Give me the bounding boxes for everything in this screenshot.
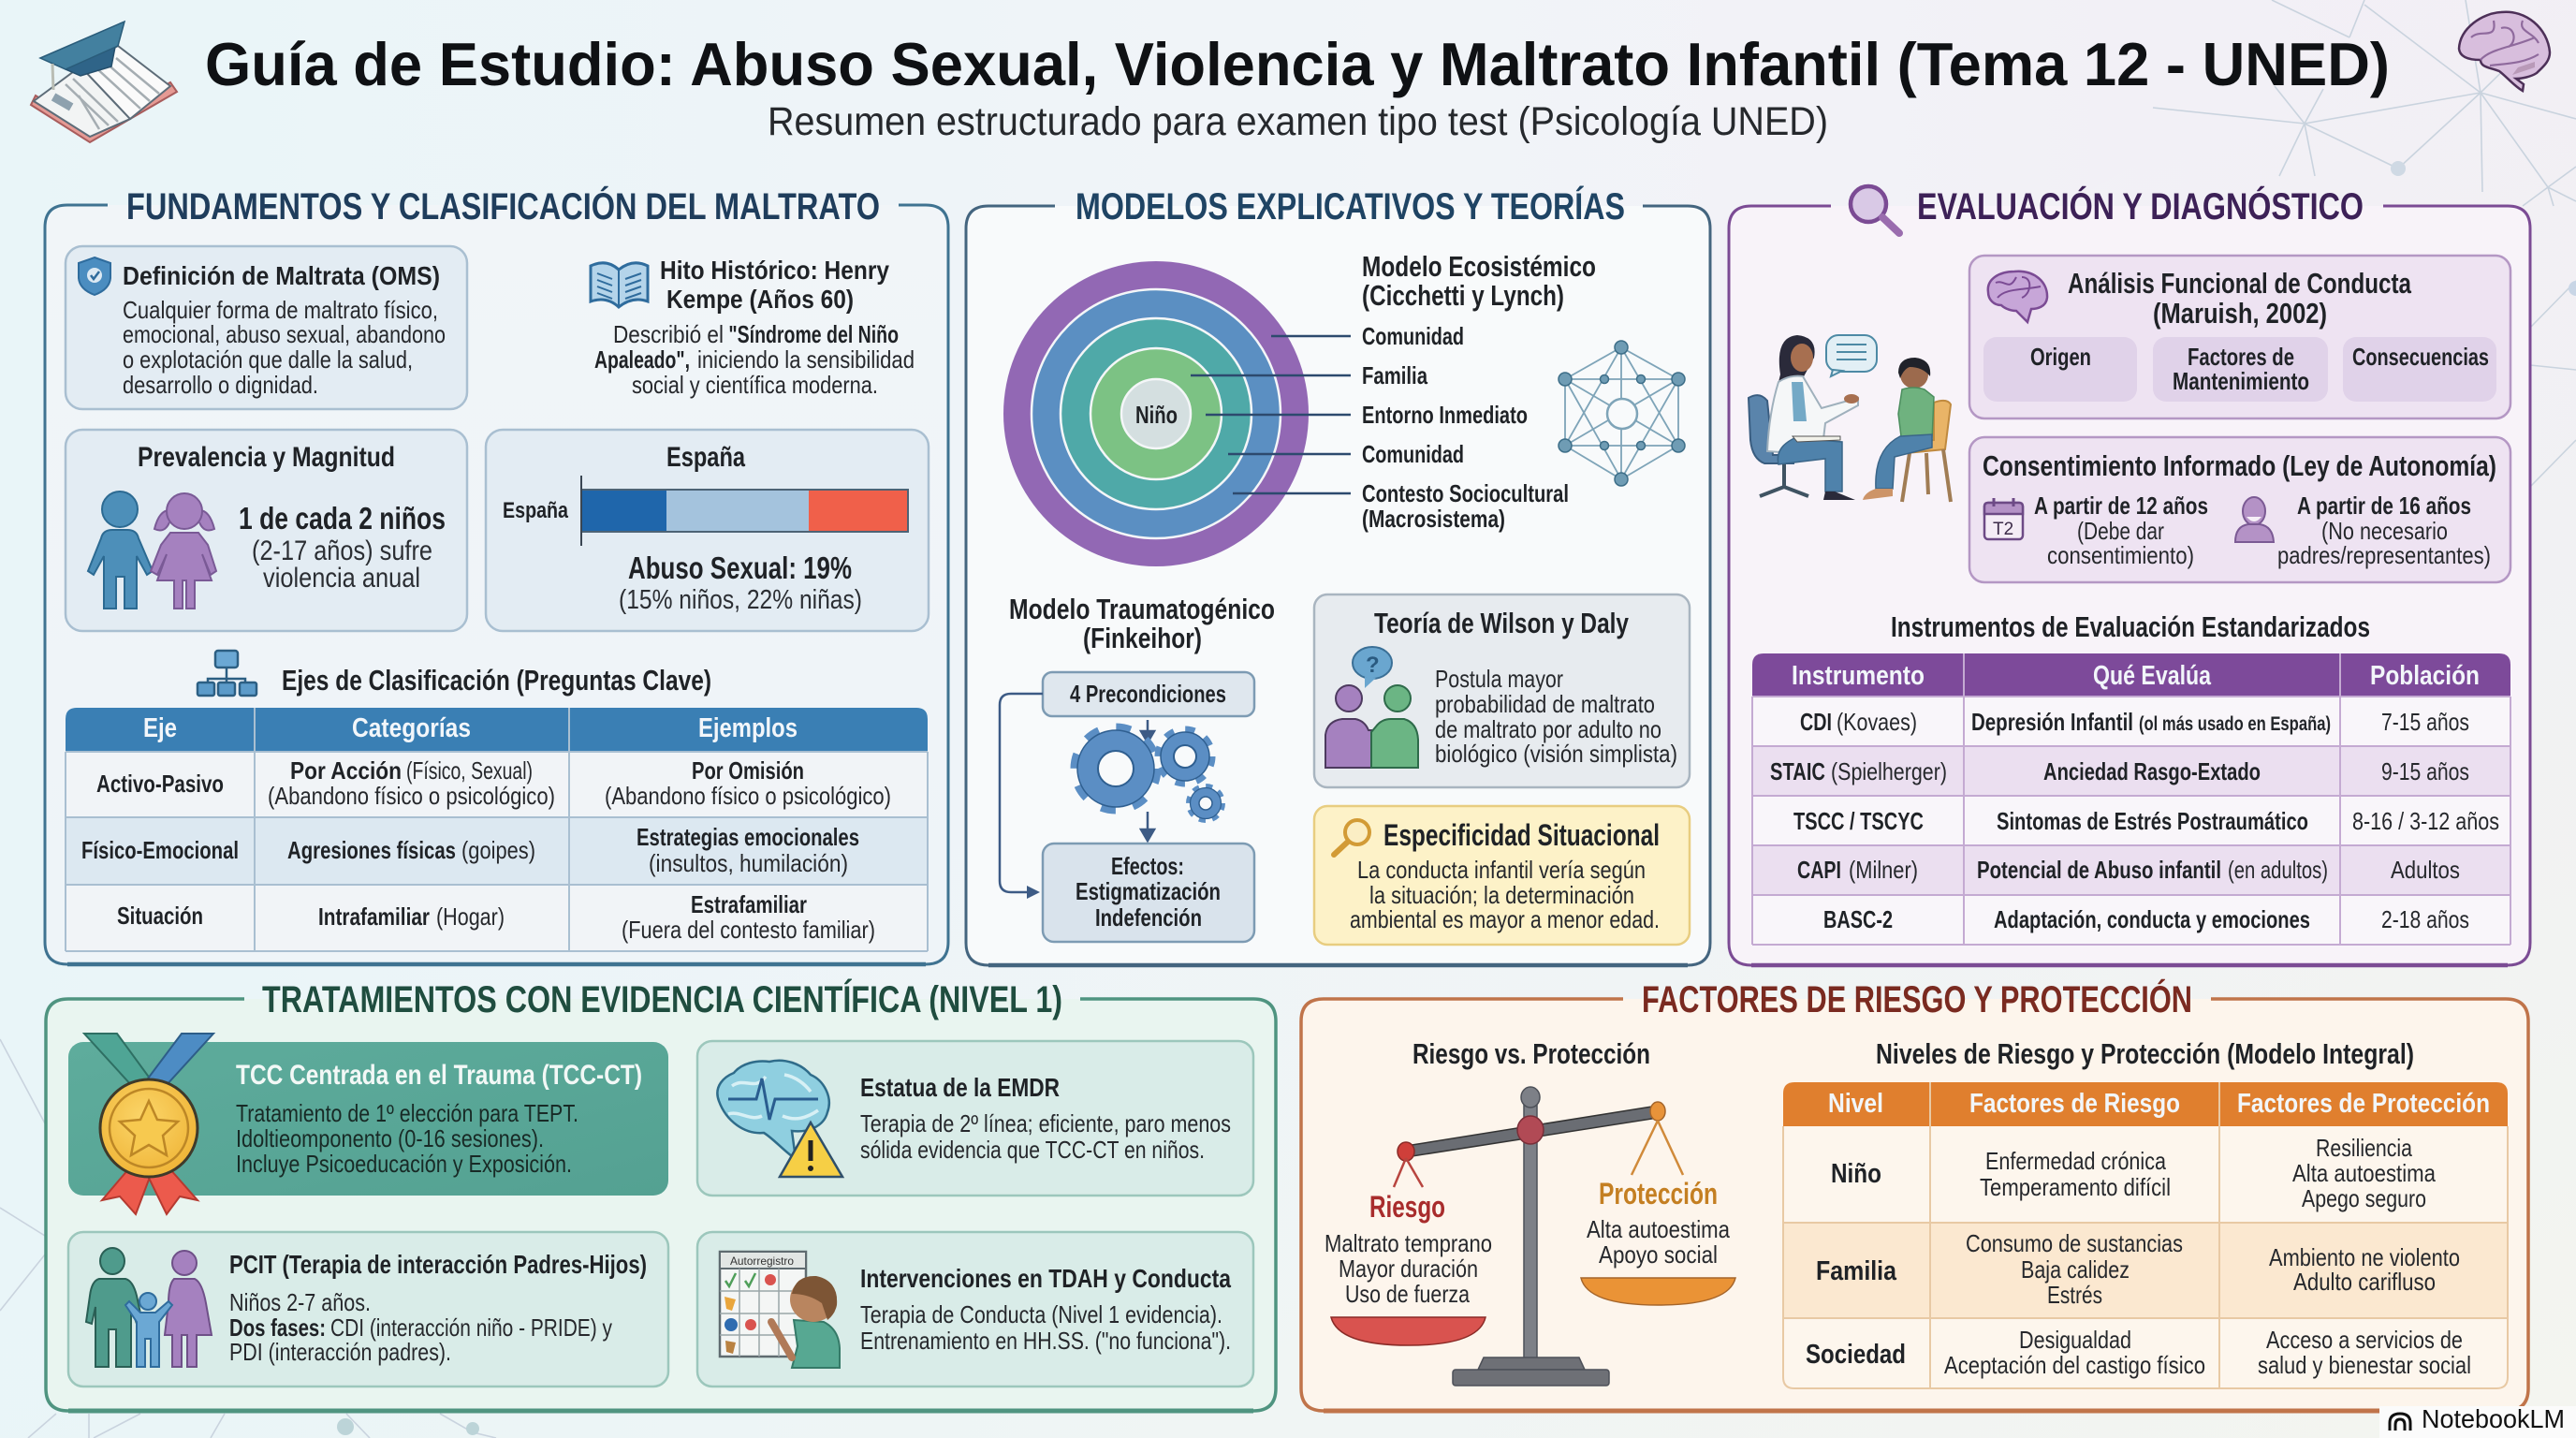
table: instrumentos: (Milner) [1849, 856, 1918, 884]
chart: concentric ecosystem [1003, 261, 1351, 566]
stat: abuso sexual: (15% niños, 22% niñas) [619, 585, 862, 615]
label: riesgo: Riesgo [1369, 1190, 1445, 1224]
card: pcit [68, 1232, 668, 1387]
heading: definición: Definición de Maltrata (OMS) [123, 261, 440, 290]
heading: tcc-ct: TCC Centrada en el Trauma (TCC-CT) [236, 1060, 642, 1091]
text: 12 años: consentimiento) [2047, 541, 2194, 569]
table: niveles: Acceso a servicios de [2266, 1326, 2463, 1354]
box: efectos: Efectos: [1111, 852, 1184, 880]
table: ejes: Categorías [352, 713, 471, 743]
text: tcc-ct: Tratamiento de 1º elección para TEPT. [236, 1099, 578, 1127]
text: definición: Cualquier forma de maltrato físico, [123, 296, 438, 324]
text: especificidad: la situación; la determinación [1369, 881, 1634, 909]
table: instrumentos: 8-16 / 3-12 años [2352, 807, 2499, 835]
labels: ecosystem levels: (Macrosistema) [1362, 505, 1505, 533]
icon: medal [84, 1034, 213, 1214]
heading: modelo ecosistémico: (Cicchetti y Lynch) [1362, 279, 1564, 312]
box: 4 precondiciones: 4 Precondiciones [1070, 680, 1226, 708]
card: consentimiento informado [1969, 437, 2510, 582]
table: ejes: (Hogar) [436, 902, 505, 931]
text: 12 años: (Debe dar [2077, 517, 2164, 545]
heading: modelo traumatogénico: (Finkeihor) [1083, 622, 1202, 654]
labels: ecosystem levels: Comunidad [1362, 322, 1464, 350]
text: definición: o explotación que dalle la salud, [123, 345, 413, 374]
table: niveles: Factores de Protección [2237, 1089, 2490, 1119]
icon: brain [1988, 271, 2047, 322]
panel: modelos explicativos [966, 185, 1710, 965]
text: hito: social y científica moderna. [632, 371, 878, 399]
labels: ecosystem levels [1362, 322, 1569, 533]
panel: evaluación y diagnóstico [1729, 184, 2530, 965]
icon: calendar [1984, 498, 2023, 539]
icon: gears [1076, 729, 1222, 820]
label: riesgo [1325, 1190, 1492, 1308]
table: instrumentos: (Spielherger) [1831, 757, 1947, 785]
table: instrumentos: 7-15 años [2381, 708, 2469, 736]
text: especificidad: ambiental es mayor a menor edad. [1350, 905, 1660, 933]
subtitle: Resumen estructurado para examen tipo test (Psicología UNED) [768, 99, 1828, 144]
illustration: clinician and child [1749, 335, 1951, 502]
table: instrumentos: CAPI [1797, 856, 1841, 884]
label: riesgo: Maltrato temprano [1325, 1229, 1492, 1257]
card: prevalencia [66, 430, 467, 631]
icon: hierarchy [198, 651, 256, 696]
text: definición [123, 296, 446, 399]
table: ejes: (goipes) [461, 836, 535, 864]
text: pcit [229, 1288, 612, 1366]
table: instrumentos: Anciedad Rasgo-Extado [2043, 757, 2261, 785]
text: pcit: Niños 2-7 años. [229, 1288, 371, 1316]
table: instrumentos: Depresión Infantil [1971, 708, 2133, 736]
arrow: feedback connector [1000, 694, 1043, 892]
box: efectos: Indefención [1095, 903, 1202, 932]
table: niveles: Familia [1816, 1256, 1897, 1286]
card: tcc-ct [68, 1034, 668, 1214]
box: 4 precondiciones [1043, 672, 1254, 716]
text: especificidad [1350, 856, 1660, 933]
text: 16 años [2277, 492, 2491, 569]
table: instrumentos: Instrumento [1792, 661, 1925, 691]
text: tcc-ct: Idoltieomponento (0-16 sesiones). [236, 1124, 544, 1152]
labels: ecosystem levels: Entorno Inmediato [1362, 401, 1528, 429]
stat: abuso sexual [619, 550, 862, 615]
heading: especificidad: Especificidad Situacional [1383, 818, 1660, 852]
heading: factores: FACTORES DE RIESGO Y PROTECCIÓN [1642, 977, 2192, 1020]
icon: magnifier purple [1851, 186, 1899, 233]
table: niveles: Aceptación del castigo físico [1944, 1351, 2205, 1379]
card: wilson y daly [1314, 594, 1690, 787]
table: instrumentos: (en adultos) [2228, 856, 2328, 884]
icon: shield [79, 257, 110, 295]
heading: tdah: Intervenciones en TDAH y Conducta [860, 1264, 1231, 1293]
card: análisis funcional [1969, 256, 2510, 418]
table: niveles: Estrés [2047, 1281, 2102, 1309]
text: pcit: PDI (interacción padres). [229, 1338, 451, 1366]
text: tdah: Entrenamiento en HH.SS. ("no funciona"). [860, 1327, 1231, 1355]
text: hito [594, 320, 915, 399]
chip: factores de mantenimiento: Mantenimiento [2173, 367, 2309, 395]
icon: family [86, 1248, 212, 1367]
table: instrumentos: Población [2370, 661, 2480, 691]
text: tdah: Terapia de Conducta (Nivel 1 evidencia). [860, 1300, 1222, 1328]
table: niveles: Alta autoestima [2292, 1159, 2436, 1187]
table: instrumentos: Sintomas de Estrés Postraumático [1997, 807, 2308, 835]
text: hito: Apaleado", [594, 345, 690, 374]
text: 16 años: (No necesario [2321, 517, 2448, 545]
heading: hito [660, 256, 889, 314]
heading: modelos: MODELOS EXPLICATIVOS Y TEORÍAS [1076, 185, 1625, 227]
chip: consecuencias: Consecuencias [2352, 343, 2489, 371]
text: hito: "Síndrome del Niño [724, 320, 899, 348]
heading: españa: España [666, 442, 745, 473]
chart: concentric ecosystem: Niño [1135, 401, 1178, 429]
panel: tratamientos [46, 978, 1276, 1411]
table: ejes [66, 708, 928, 951]
heading: fundamentos: FUNDAMENTOS Y CLASIFICACIÓN DEL MALTRATO [126, 184, 880, 227]
text: hito: iniciendo la sensibilidad [697, 345, 915, 374]
table: ejes: (insultos, humilación) [649, 849, 848, 877]
icon: behaviour chart with child: Autorregistro [730, 1255, 794, 1268]
box: efectos [1043, 844, 1254, 942]
heading: emdr: Estatua de la EMDR [860, 1073, 1060, 1102]
table: ejes: Ejemplos [698, 713, 798, 743]
text: tdah [860, 1300, 1231, 1355]
chip: origen: Origen [2030, 343, 2091, 371]
table: instrumentos [1752, 653, 2510, 945]
text: 16 años: A partir de 16 años [2297, 492, 2471, 520]
table: instrumentos: 9-15 años [2381, 757, 2469, 785]
text: especificidad: La conducta infantil vería según [1357, 856, 1646, 884]
heading: análisis funcional: (Maruish, 2002) [2153, 297, 2327, 330]
table: instrumentos: CDI [1800, 708, 1832, 736]
heading: hito: Kempe (Años 60) [666, 285, 854, 314]
text: 12 años [2034, 492, 2208, 569]
label: riesgo: Mayor duración [1339, 1255, 1478, 1283]
card: especificidad situacional [1314, 806, 1690, 945]
label: protección: Protección [1599, 1177, 1718, 1211]
table: niveles: Consumo de sustancias [1966, 1229, 2183, 1257]
heading: ejes de clasificación: Ejes de Clasificación (Preguntas Clave) [282, 664, 711, 697]
label: riesgo: Uso de fuerza [1345, 1280, 1470, 1308]
text: hito: Describió el [613, 320, 724, 348]
card: definición [66, 246, 467, 409]
table: instrumentos: (Kovaes) [1837, 708, 1917, 736]
box: efectos: Estigmatización [1076, 877, 1221, 905]
table: instrumentos: BASC-2 [1823, 905, 1893, 933]
arrow: gears to efectos [1141, 812, 1154, 841]
heading: niveles: Niveles de Riesgo y Protección (Modelo Integral) [1876, 1037, 2414, 1070]
heading: riesgo vs protección: Riesgo vs. Protección [1412, 1037, 1650, 1070]
heading: modelo ecosistémico: Modelo Ecosistémico [1362, 250, 1596, 283]
heading: modelo ecosistémico [1362, 250, 1596, 312]
table: ejes: (Abandono físico o psicológico) [268, 782, 555, 810]
text: wilson: de maltrato por adulto no [1435, 715, 1661, 743]
card: emdr [697, 1041, 1253, 1196]
icon: two adults: ? [1366, 653, 1380, 678]
table: niveles: Ambiento ne violento [2269, 1243, 2460, 1271]
illustration: balance scale [1331, 1087, 1735, 1386]
text: 16 años: padres/representantes) [2277, 541, 2491, 569]
icon: brain top right [2459, 12, 2550, 91]
table: niveles: Apego seguro [2302, 1184, 2426, 1212]
table: niveles: Factores de Riesgo [1969, 1089, 2180, 1119]
text: tcc-ct: Incluye Psicoeducación y Exposición. [236, 1150, 572, 1178]
text: wilson [1435, 665, 1677, 768]
icon: book with graduation cap [31, 22, 177, 142]
text: emdr [860, 1109, 1231, 1164]
table: ejes: Por Acción [290, 756, 402, 785]
table: ejes: (Fuera del contesto familiar) [622, 916, 875, 944]
icon: magnifier [1334, 820, 1369, 855]
heading: evaluación: EVALUACIÓN Y DIAGNÓSTICO [1917, 184, 2364, 227]
stat: abuso sexual: Abuso Sexual: 19% [628, 550, 852, 585]
watermark: NotebookLM [2379, 1404, 2576, 1438]
panel: factores de riesgo y protección [1301, 977, 2528, 1411]
table: ejes: Intrafamiliar [318, 902, 430, 931]
arrow: precondiciones to gears [1141, 720, 1154, 742]
text: definición: desarrollo o dignidad. [123, 371, 318, 399]
stacked bar chart: España [503, 498, 569, 523]
title: Guía de Estudio: Abuso Sexual, Violencia y Maltrato Infantil (Tema 12 - UNED) [205, 30, 2390, 98]
text: pcit: CDI (interacción niño - PRIDE) y [330, 1313, 612, 1342]
chip: consecuencias [2343, 337, 2496, 402]
label: protección [1587, 1177, 1730, 1269]
text: emdr: sólida evidencia que TCC-CT en niños. [860, 1136, 1205, 1164]
table: ejes: Por Omisión [692, 756, 804, 785]
stat: 1 de cada 2 niños: violencia anual [263, 563, 420, 594]
table: instrumentos: Adaptación, conducta y emociones [1994, 905, 2310, 933]
panel: fundamentos y clasificación [45, 184, 948, 964]
icon: person [2235, 497, 2274, 542]
icon: calendar: T2 [1993, 520, 2013, 539]
icon: brain with warning [717, 1061, 842, 1177]
heading: modelo traumatogénico: Modelo Traumatogénico [1009, 593, 1275, 625]
table: niveles: Resiliencia [2316, 1134, 2412, 1162]
table: niveles: salud y bienestar social [2258, 1351, 2471, 1379]
block: hito histórico [591, 256, 915, 399]
labels: ecosystem levels: Contesto Sociocultural [1362, 479, 1569, 507]
table: ejes: (Abandono físico o psicológico) [605, 782, 891, 810]
table: niveles: Enfermedad crónica [1985, 1147, 2166, 1175]
watermark: NotebookLM: NotebookLM [2422, 1404, 2565, 1433]
stat: 1 de cada 2 niños: (2-17 años) sufre [252, 536, 432, 566]
table: niveles: Niño [1831, 1159, 1881, 1189]
chip: origen [1983, 337, 2137, 402]
table: ejes: Eje [143, 713, 177, 743]
labels: ecosystem levels: Comunidad [1362, 440, 1464, 468]
label: protección: Alta autoestima [1587, 1215, 1730, 1243]
table: instrumentos: STAIC [1770, 757, 1825, 785]
table: niveles: Temperamento difícil [1980, 1173, 2171, 1201]
stat: 1 de cada 2 niños [239, 501, 446, 594]
table: ejes: Físico-Emocional [81, 836, 239, 864]
heading: instrumentos: Instrumentos de Evaluación Estandarizados [1891, 610, 2370, 643]
table: ejes: Estrafamiliar [691, 890, 807, 918]
heading: wilson: Teoría de Wilson y Daly [1374, 607, 1630, 639]
card: tdah [697, 1232, 1253, 1387]
stacked bar chart [503, 476, 908, 546]
text: definición: emocional, abuso sexual, abandono [123, 320, 446, 348]
table: ejes: Agresiones físicas [287, 836, 456, 864]
text: 12 años: A partir de 12 años [2034, 492, 2208, 520]
icon: two adults [1325, 647, 1418, 768]
icon: boy and girl [88, 492, 216, 609]
heading: análisis funcional [2068, 267, 2412, 330]
text: wilson: biológico (visión simplista) [1435, 740, 1677, 768]
table: instrumentos: (ol más usado en España) [2139, 713, 2331, 735]
icon: network [1559, 341, 1685, 486]
heading: tratamientos: TRATAMIENTOS CON EVIDENCIA CIENTÍFICA (NIVEL 1) [262, 978, 1062, 1020]
heading: pcit: PCIT (Terapia de interacción Padres-Hijos) [229, 1250, 647, 1279]
text: wilson: probabilidad de maltrato [1435, 690, 1655, 718]
table: instrumentos: TSCC / TSCYC [1793, 807, 1924, 835]
arrow head: feedback [1027, 886, 1040, 899]
heading: hito: Hito Histórico: Henry [660, 256, 889, 285]
table: niveles: Nivel [1828, 1089, 1883, 1119]
table: instrumentos: Potencial de Abuso infantil [1977, 856, 2221, 884]
table: niveles: Baja calidez [2021, 1255, 2130, 1284]
table: instrumentos: 2-18 años [2381, 905, 2469, 933]
text: wilson: Postula mayor [1435, 665, 1563, 693]
table: instrumentos: Adultos [2391, 856, 2460, 884]
table: instrumentos: Qué Evalúa [2093, 661, 2212, 691]
table: niveles [1783, 1082, 2508, 1388]
text: emdr: Terapia de 2º línea; eficiente, paro menos [860, 1109, 1231, 1137]
table: niveles: Desigualdad [2019, 1326, 2131, 1354]
icon: open book [591, 263, 648, 307]
icon: behaviour chart with child [720, 1252, 840, 1368]
table: ejes: Activo-Pasivo [96, 770, 224, 798]
heading: análisis funcional: Análisis Funcional de Conducta [2068, 267, 2412, 300]
table: ejes: Estrategias emocionales [637, 823, 859, 851]
chip: factores de mantenimiento: Factores de [2188, 343, 2294, 371]
chip: factores de mantenimiento [2153, 337, 2328, 402]
stat: 1 de cada 2 niños: 1 de cada 2 niños [239, 501, 446, 536]
table: niveles: Adulto carifluso [2293, 1268, 2436, 1296]
label: protección: Apoyo social [1599, 1240, 1718, 1269]
table: niveles: Sociedad [1806, 1340, 1906, 1370]
card: españa [486, 430, 929, 631]
heading: prevalencia: Prevalencia y Magnitud [138, 442, 395, 473]
table: ejes: Situación [117, 902, 203, 930]
table: ejes: (Físico, Sexual) [406, 756, 533, 785]
heading: modelo traumatogénico [1009, 593, 1275, 654]
text: pcit: Dos fases: [229, 1313, 326, 1342]
text: tcc-ct [236, 1099, 578, 1178]
labels: ecosystem levels: Familia [1362, 361, 1427, 389]
